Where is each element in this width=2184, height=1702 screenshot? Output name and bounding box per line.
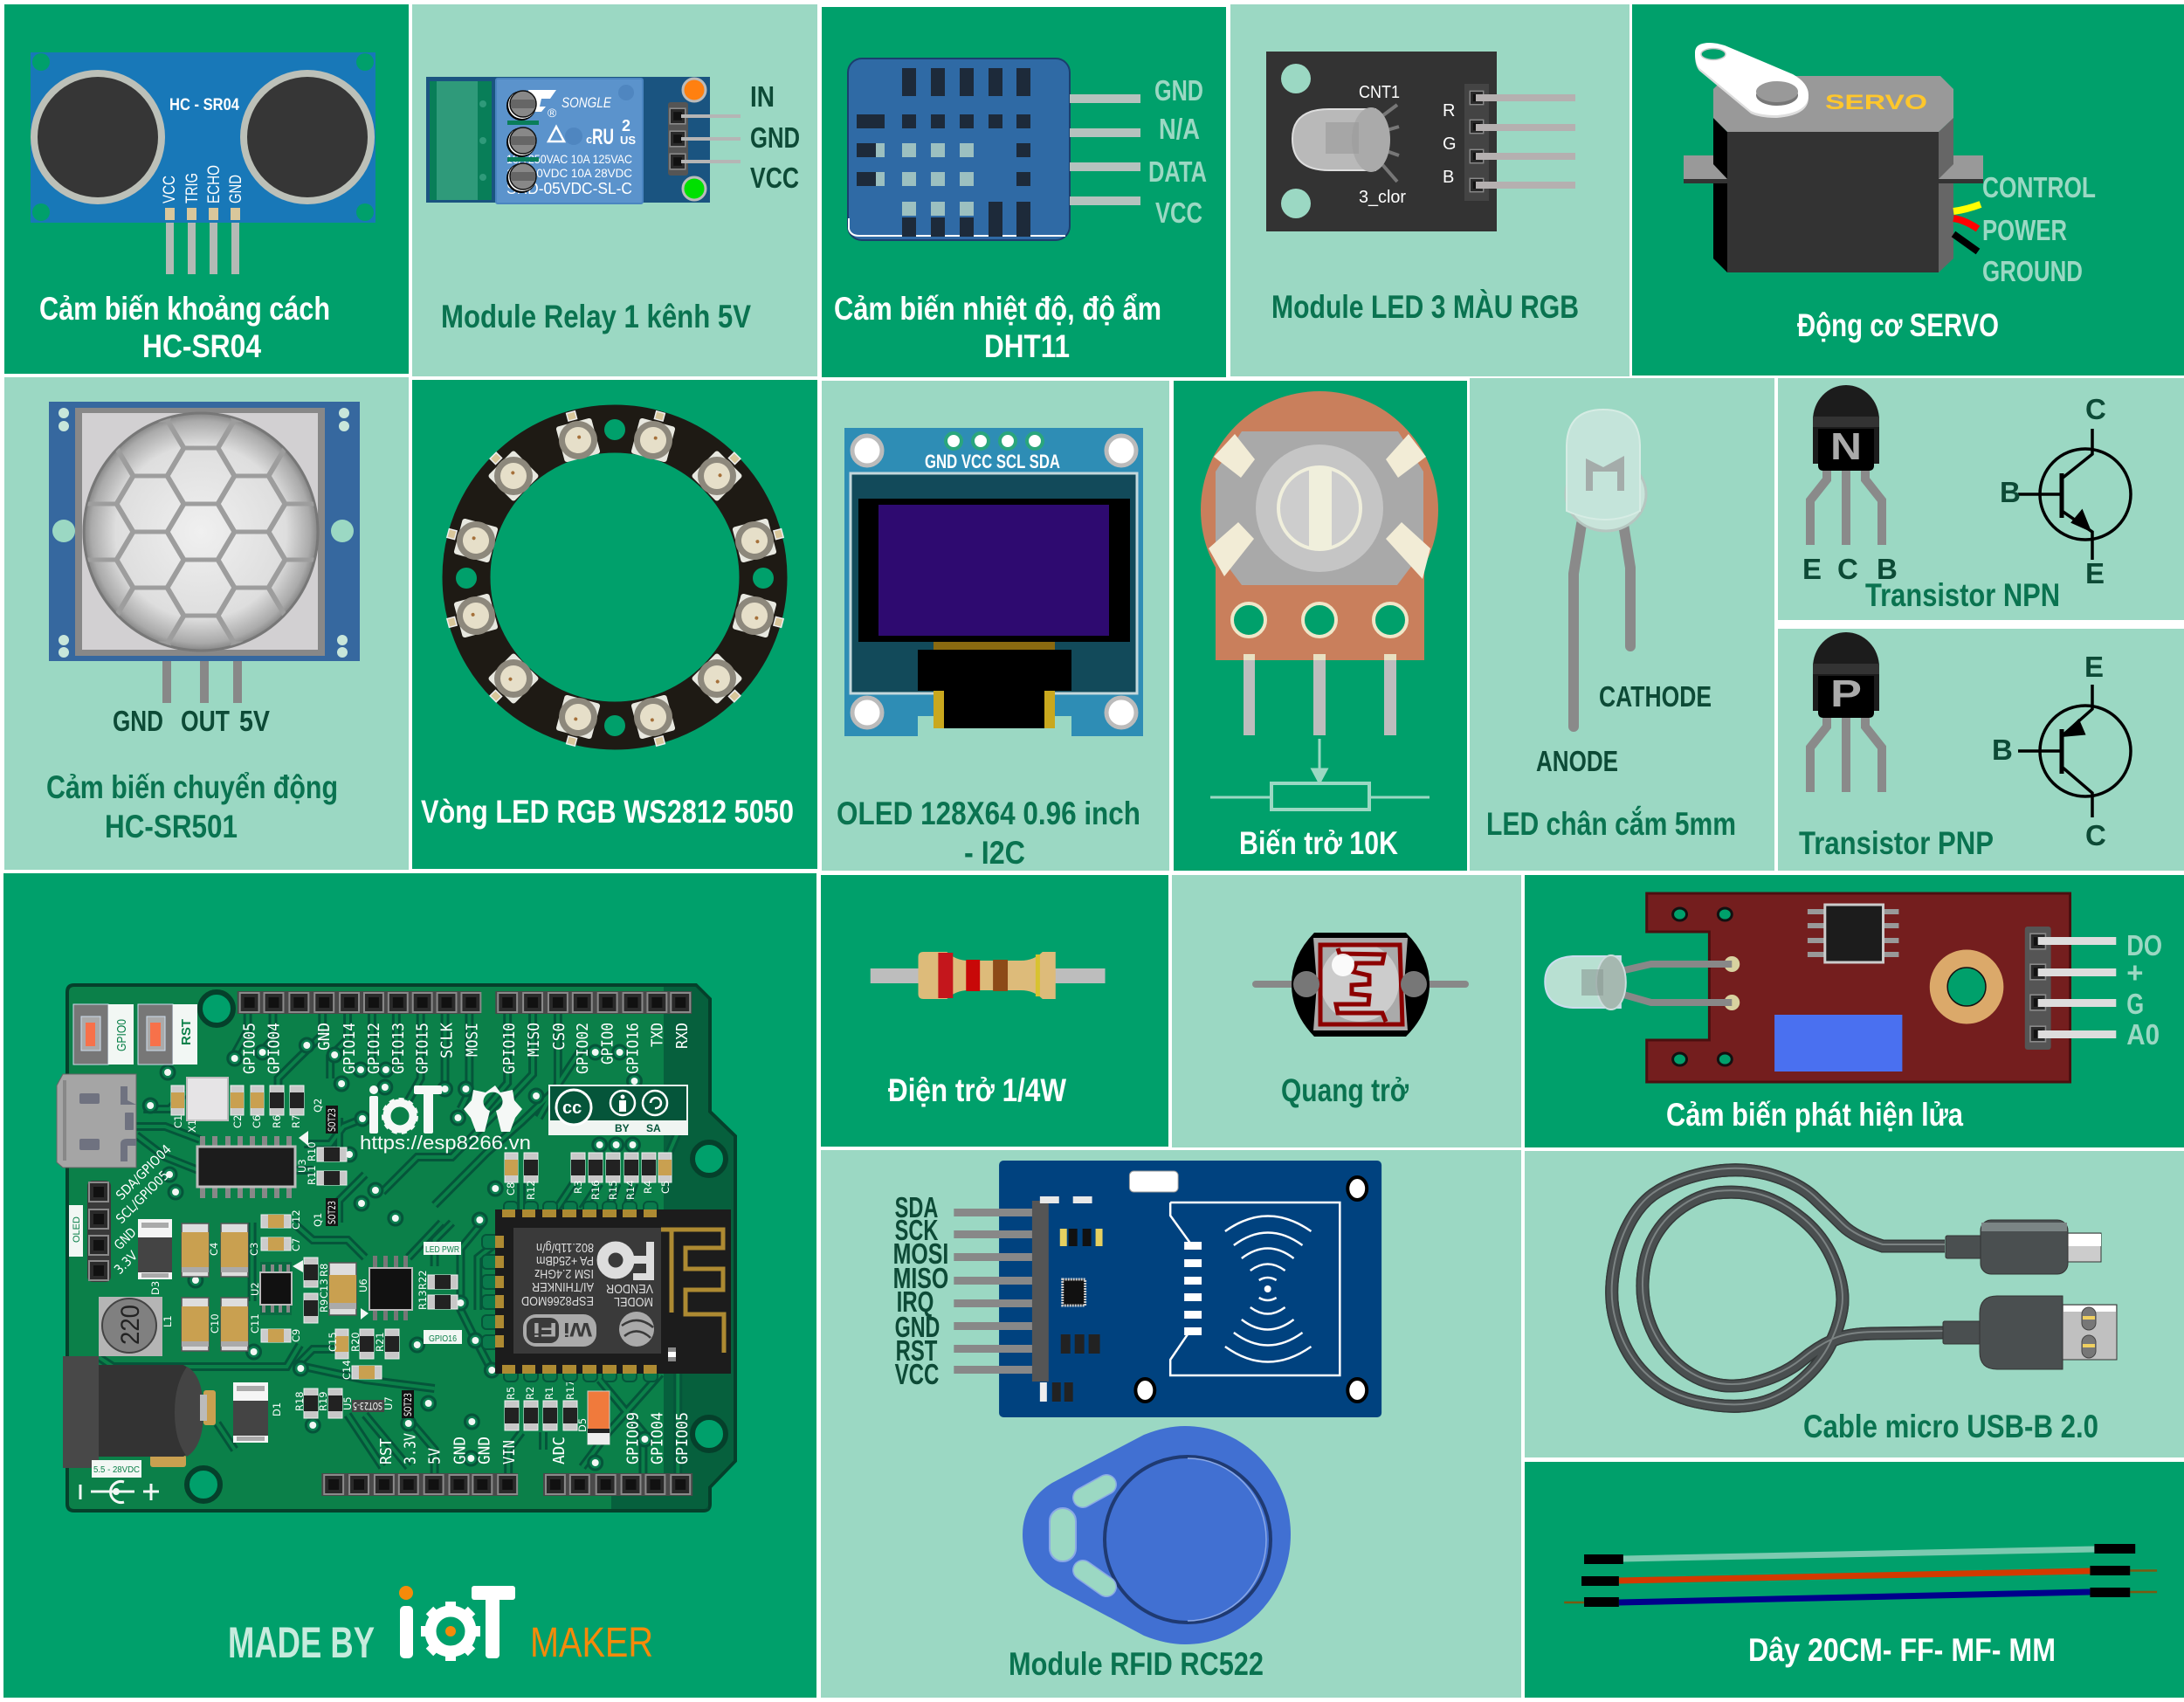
labels: NPN pins <box>1802 553 1898 585</box>
components: SMD parts: SOT23 <box>402 1393 414 1416</box>
labels: PIR pins: GND <box>113 705 163 737</box>
icon: ESP8266 module: MODEL <box>614 1294 653 1309</box>
icon: PNP package: P <box>1830 672 1862 715</box>
labels: pin names: GND <box>451 1437 469 1464</box>
icon: buttons: GPIO0 <box>114 1019 129 1051</box>
labels: pin names: GPIO16 <box>624 1023 642 1074</box>
icon: ESP8266 module: 802.11b/g/n <box>536 1240 594 1255</box>
label: DHT11: DHT11 <box>984 328 1070 364</box>
icon: RGB LED module: B <box>1443 168 1454 187</box>
labels: pin names: GPIO09 <box>624 1412 642 1464</box>
icon: buttons: RST <box>179 1019 194 1045</box>
label: OLED: - I2C <box>964 835 1025 871</box>
labels: pin names: GPIO13 <box>389 1023 408 1074</box>
label: wires: Dây 20CM- FF- MF- MM <box>1748 1632 2056 1668</box>
icon: PNP symbol <box>2018 685 2131 817</box>
icon: CC license: BY <box>615 1122 630 1134</box>
labels: component designators: R1 <box>543 1387 555 1400</box>
label: PNP: Transistor PNP <box>1799 825 1994 861</box>
labels: relay pins: GND <box>750 121 800 154</box>
icon: relay board: SONGLE <box>562 94 612 111</box>
components: SMD parts: GPIO16 <box>429 1334 457 1344</box>
icon: relay board: ® <box>548 106 557 120</box>
icon: relay board: SRD-05VDC-SL-C <box>506 180 632 197</box>
labels: pin names: MOSI <box>463 1023 481 1057</box>
label: ring: Vòng LED RGB WS2812 5050 <box>421 794 794 830</box>
labels: RFID pins: GND <box>895 1311 940 1343</box>
labels: pin names: 3.3V <box>402 1433 420 1464</box>
labels: component designators: C7 <box>290 1238 302 1251</box>
label: HC-SR04: HC-SR04 <box>142 328 261 364</box>
icon: logo on PCB <box>360 1085 531 1154</box>
icon: ESP8266 module: AI/THINKER <box>532 1279 594 1294</box>
labels: component designators: R20 <box>349 1332 362 1352</box>
icon: OLED display: GND VCC SCL SDA <box>925 451 1060 472</box>
labels: servo wires <box>1982 171 2096 287</box>
labels: pin names <box>241 1023 692 1464</box>
logo: MADE BY IoT MAKER <box>228 1586 653 1667</box>
label: DHT11: Cảm biến nhiệt độ, độ ẩm <box>834 291 1161 327</box>
icon: CC license: SA <box>646 1122 661 1134</box>
labels: DHT11 pins: N/A <box>1159 113 1200 145</box>
icon: power jack: 5.5 - 28VDC <box>93 1465 140 1475</box>
components: SMD parts: SOT23 <box>326 1201 338 1224</box>
panel: LED 5mm <box>1470 378 1774 871</box>
panel: Servo <box>1632 4 2184 376</box>
labels: component designators: U7 <box>382 1396 395 1410</box>
labels: component designators: R6 <box>271 1115 283 1128</box>
panel: OLED <box>822 381 1169 871</box>
components: SMD parts: SOT23 <box>326 1108 338 1132</box>
labels: pin names: GPIO14 <box>341 1023 359 1074</box>
labels: LED legs <box>1536 680 1712 777</box>
labels: component designators <box>149 1099 672 1432</box>
icon: OLED header: SCL/GPIO05 <box>113 1168 172 1227</box>
panel: Transistor NPN <box>1778 378 2184 620</box>
labels: NPN symbol: B <box>2000 476 2021 508</box>
icon: RGB LED module <box>1266 52 1575 231</box>
label: LED: LED chân cắm 5mm <box>1486 805 1736 842</box>
labels: NPN pins: E <box>1802 553 1822 585</box>
icon: inductor L1 <box>99 1297 162 1356</box>
labels: component designators: Q2 <box>312 1099 324 1113</box>
label: resistor: Điện trở 1/4W <box>888 1072 1066 1108</box>
labels: RFID pins: MOSI <box>893 1237 948 1270</box>
labels: servo wires: POWER <box>1982 214 2067 246</box>
labels: flame pins: G <box>2126 988 2144 1020</box>
icon: ESP8266 module: VENDOR <box>606 1281 653 1296</box>
labels: PNP symbol: B <box>1992 734 2013 766</box>
components: SMD parts: LED PWR <box>425 1245 459 1255</box>
label: Servo: Động cơ SERVO <box>1797 307 1999 343</box>
icon: OLED header: 3.3V <box>111 1247 141 1278</box>
icon: RGB LED module: G <box>1443 134 1457 154</box>
labels: component designators: R3 <box>572 1181 584 1194</box>
icon: servo motor: SERVO <box>1825 91 1927 114</box>
labels: RFID pins: VCC <box>895 1358 939 1390</box>
icon: CC license <box>549 1085 687 1134</box>
icon: PNP package <box>1810 632 1882 792</box>
labels: NPN symbol: C <box>2085 393 2106 425</box>
labels: component designators: U5 <box>341 1396 354 1410</box>
label: LDR: Quang trở <box>1281 1072 1409 1108</box>
labels: component designators: C13 <box>318 1278 330 1299</box>
labels: component designators: R9 <box>318 1299 330 1313</box>
labels: component designators: R4 <box>642 1181 654 1194</box>
label: OLED: OLED 128X64 0.96 inch <box>837 796 1140 831</box>
labels: component designators: R19 <box>317 1391 329 1411</box>
labels: PIR pins <box>113 705 270 737</box>
labels: component designators: R2 <box>524 1387 536 1400</box>
labels: RFID pins: MISO <box>893 1262 948 1294</box>
label: potentiometer: Biến trở 10K <box>1239 825 1398 861</box>
icon: OLED header: GND <box>111 1224 140 1253</box>
labels: pin names: TXD <box>648 1023 666 1047</box>
panel: Transistor PNP <box>1778 629 2184 871</box>
icon: PIR module <box>49 392 360 703</box>
icon: HC-SR04 board: GND <box>227 175 245 203</box>
icon: inductor L1: 220 <box>116 1305 145 1345</box>
labels: component designators: C2 <box>231 1115 244 1128</box>
labels: servo wires: GROUND <box>1982 255 2083 287</box>
icon: HC-SR04 board: TRIG <box>183 173 202 203</box>
icon: DHT11 sensor <box>848 59 1140 240</box>
label: USB cable: Cable micro USB-B 2.0 <box>1803 1409 2098 1444</box>
labels: NPN symbol: E <box>2085 557 2105 589</box>
panel: DHT11 <box>822 7 1226 377</box>
labels: component designators: R22 <box>417 1270 429 1290</box>
labels: pin names: GPIO02 <box>574 1023 592 1074</box>
panel: Potentiometer <box>1174 381 1467 871</box>
panel: Relay module <box>412 4 817 376</box>
panel: USB cable <box>1525 1151 2184 1457</box>
labels: pin names: RXD <box>673 1023 692 1049</box>
icon: servo motor <box>1684 43 1983 272</box>
icon: RGB LED module: R <box>1443 101 1455 121</box>
labels: PNP symbol: C <box>2085 819 2106 851</box>
labels: component designators: Q1 <box>312 1213 324 1227</box>
icon: flame sensor <box>1545 893 2116 1082</box>
icon: LED ring <box>443 407 788 750</box>
labels: component designators: L1 <box>162 1315 174 1327</box>
labels: component designators: X1 <box>186 1120 198 1133</box>
label: RFID: Module RFID RC522 <box>1009 1646 1264 1682</box>
logo: MADE BY IoT MAKER: MAKER <box>530 1620 653 1666</box>
labels: component designators: R11 <box>306 1165 318 1185</box>
icon: RGB LED module: 3_clor <box>1359 188 1406 207</box>
logo: MADE BY IoT MAKER: MADE BY <box>228 1618 375 1667</box>
icon: OLED display <box>844 428 1143 736</box>
labels: component designators: R12 <box>525 1180 537 1200</box>
labels: component designators: D5 <box>576 1418 589 1432</box>
labels: RFID pins: IRQ <box>897 1285 934 1318</box>
panel: Jumper wires <box>1525 1462 2184 1698</box>
labels: PIR pins: 5V <box>239 705 270 737</box>
labels: component designators: C4 <box>208 1243 220 1256</box>
labels: pin names: GPIO05 <box>241 1023 259 1074</box>
labels: NPN pins: C <box>1837 553 1858 585</box>
labels: LED legs: ANODE <box>1536 745 1618 777</box>
labels: component designators: C1 <box>172 1115 184 1128</box>
icon: relay board: c <box>586 133 592 146</box>
labels: RFID pins: SCK <box>895 1214 939 1246</box>
icon: relay board: 2 <box>622 117 630 134</box>
icon: RGB LED module: CNT1 <box>1359 83 1400 102</box>
icon: relay board: US <box>620 134 636 147</box>
labels: component designators: U3 <box>296 1159 308 1173</box>
icon: diode D3 <box>138 1219 172 1279</box>
panel: Flame sensor <box>1525 875 2184 1147</box>
panel: WS2812 ring <box>412 380 817 869</box>
labels: component designators: C3 <box>248 1243 260 1256</box>
icon: ESP8266 module: ESP8266MOD <box>521 1293 594 1308</box>
icon: power jack <box>63 1356 216 1502</box>
labels: component designators: D1 <box>271 1402 283 1416</box>
labels: LED legs: CATHODE <box>1599 680 1712 713</box>
icon: relay board: RU <box>592 125 614 149</box>
panel: Resistor <box>821 875 1168 1147</box>
labels: pin names: GPIO15 <box>414 1023 432 1074</box>
icon: NPN package: N <box>1830 425 1862 468</box>
labels: component designators: C6 <box>251 1115 263 1128</box>
label: flame: Cảm biến phát hiện lửa <box>1666 1097 1963 1133</box>
icon: OLED header: SDA/GPIO04 <box>113 1141 175 1203</box>
label: OLED <box>837 796 1140 871</box>
labels: component designators: R13 <box>417 1290 429 1310</box>
label: NPN: Transistor NPN <box>1865 577 2060 613</box>
labels: component designators: C8 <box>505 1182 517 1196</box>
labels: component designators: R18 <box>293 1391 306 1411</box>
icon: CC license: cc <box>562 1099 582 1118</box>
labels: component designators: U6 <box>357 1278 369 1292</box>
components: SMD parts <box>171 1078 672 1444</box>
icon: USB cable <box>1612 1168 2117 1406</box>
icon: relay board: 10A 250VAC 10A 125VAC <box>506 152 632 166</box>
labels: component designators: U2 <box>249 1282 261 1296</box>
icon: relay board: 10A 30VDC 10A 28VDC <box>506 166 632 180</box>
labels: pin names: 5V <box>426 1448 444 1464</box>
panel: RFID <box>821 1150 1521 1698</box>
icon: photoresistor <box>1252 933 1469 1037</box>
labels: relay pins: IN <box>750 80 775 113</box>
labels: component designators: R21 <box>374 1332 386 1352</box>
icon: PCB <box>57 985 735 1511</box>
labels: component designators: C14 <box>341 1360 353 1380</box>
label: HC-SR04: Cảm biến khoảng cách <box>39 291 330 327</box>
labels: component designators: C15 <box>327 1332 339 1352</box>
labels: DHT11 pins: DATA <box>1148 155 1207 188</box>
labels: pin names: GPIO04 <box>265 1023 283 1074</box>
labels: flame pins <box>2126 929 2162 1051</box>
labels: pin names: GPIO10 <box>500 1023 519 1074</box>
icon: ESP8266 module: Fi <box>533 1319 557 1340</box>
labels: pin names: GPIO05 <box>673 1412 692 1464</box>
icon: HC-SR04 board <box>31 52 375 274</box>
labels: RFID pins: RST <box>896 1334 937 1367</box>
panel: RGB LED <box>1230 4 1629 376</box>
icon: RFID tag <box>1023 1426 1291 1644</box>
labels: pin names: GPIO0 <box>599 1023 617 1065</box>
labels: pin names: ADC <box>550 1437 568 1464</box>
labels: RFID pins <box>893 1191 948 1390</box>
labels: pin names: CS0 <box>550 1023 568 1051</box>
labels: flame pins: DO <box>2126 929 2162 961</box>
icon: buttons <box>73 1004 197 1065</box>
icon: jumper wires <box>1564 1544 2157 1607</box>
panel: HC-SR04 ultrasonic sensor <box>4 4 409 374</box>
labels: servo wires: CONTROL <box>1982 171 2096 203</box>
icon: HC-SR04 board: HC - SR04 <box>169 96 239 114</box>
icon: ESP8266 module: ISM 2.4GHz <box>534 1266 594 1281</box>
labels: component designators: C12 <box>290 1209 302 1230</box>
icon: LED <box>1566 410 1646 727</box>
labels: component designators: R15 <box>607 1180 619 1200</box>
labels: pin names: GPIO12 <box>365 1023 383 1074</box>
labels: DHT11 pins <box>1148 74 1207 229</box>
label: Relay: Module Relay 1 kênh 5V <box>441 299 751 334</box>
labels: component designators: C11 <box>249 1313 261 1333</box>
labels: pin names: GPIO04 <box>648 1412 666 1464</box>
labels: pin names: RST <box>377 1438 396 1464</box>
icon: ESP8266 module <box>482 1202 731 1382</box>
labels: pin names: SCLK <box>438 1023 456 1058</box>
labels: NPN pins: B <box>1877 553 1898 585</box>
labels: PNP symbol: E <box>2084 651 2104 683</box>
labels: component designators: C9 <box>290 1329 302 1342</box>
labels: component designators: R5 <box>505 1387 517 1400</box>
headers: pin rows <box>238 991 692 1496</box>
labels: pin names: VIN <box>500 1440 519 1464</box>
icon: micro USB port <box>57 1074 136 1168</box>
labels: component designators: R17 <box>564 1380 576 1400</box>
icon: potentiometer <box>1201 391 1438 735</box>
icon: diode D1 <box>233 1382 268 1443</box>
icon: resistor <box>871 952 1106 999</box>
panel: PIR <box>4 377 409 870</box>
labels: RFID pins: SDA <box>895 1191 938 1223</box>
icon: ESP8266 module: Wi <box>563 1319 592 1340</box>
labels: pin names: GND <box>475 1437 493 1464</box>
labels: flame pins: + <box>2126 956 2143 989</box>
labels: component designators: R7 <box>290 1115 302 1128</box>
labels: component designators: C5 <box>659 1181 672 1194</box>
labels: component designators: C10 <box>209 1313 221 1333</box>
icon: potentiometer symbol <box>1210 739 1430 810</box>
icon: OLED header: OLED <box>72 1216 82 1243</box>
label: RGB LED: Module LED 3 MÀU RGB <box>1271 289 1579 325</box>
labels: component designators: D3 <box>149 1281 162 1295</box>
vias <box>143 1038 651 1470</box>
icon: NPN package <box>1810 385 1882 545</box>
labels: NPN symbol <box>2000 393 2106 589</box>
labels: flame pins: A0 <box>2126 1018 2160 1051</box>
icon: RFID board <box>954 1161 1381 1417</box>
labels: component designators: R8 <box>318 1264 330 1277</box>
labels: relay pins: VCC <box>750 162 799 194</box>
label: PIR: Cảm biến chuyển động <box>46 769 338 805</box>
icon: relay board <box>426 77 741 203</box>
panel: ESP8266 board <box>3 873 816 1698</box>
label: DHT11 <box>834 291 1161 364</box>
label: HC-SR04 <box>39 291 330 364</box>
icon: ESP8266 module: PA +25dBm <box>536 1253 594 1268</box>
labels: component designators: R16 <box>589 1180 602 1200</box>
labels: DHT11 pins: VCC <box>1155 196 1202 229</box>
labels: component designators: R10 <box>306 1141 318 1161</box>
labels: PIR pins: OUT <box>181 705 230 737</box>
labels: DHT11 pins: GND <box>1154 74 1203 107</box>
panel: LDR <box>1172 875 1521 1147</box>
icon: NPN symbol <box>2018 429 2131 560</box>
components: SMD parts: SOT23-5 <box>353 1400 382 1412</box>
labels: component designators: R14 <box>624 1180 637 1200</box>
labels: relay pins <box>750 80 800 194</box>
icon: HC-SR04 board: VCC <box>161 176 179 203</box>
icon: HC-SR04 board: ECHO <box>205 165 224 203</box>
icon: OLED header <box>69 1141 175 1282</box>
labels: PNP symbol <box>1992 651 2106 851</box>
label: PIR <box>46 769 338 844</box>
labels: pin names: GND <box>315 1023 334 1051</box>
icon: logo on PCB: https://esp8266.vn <box>360 1132 531 1154</box>
label: PIR: HC-SR501 <box>105 809 238 844</box>
labels: pin names: MISO <box>525 1023 543 1057</box>
